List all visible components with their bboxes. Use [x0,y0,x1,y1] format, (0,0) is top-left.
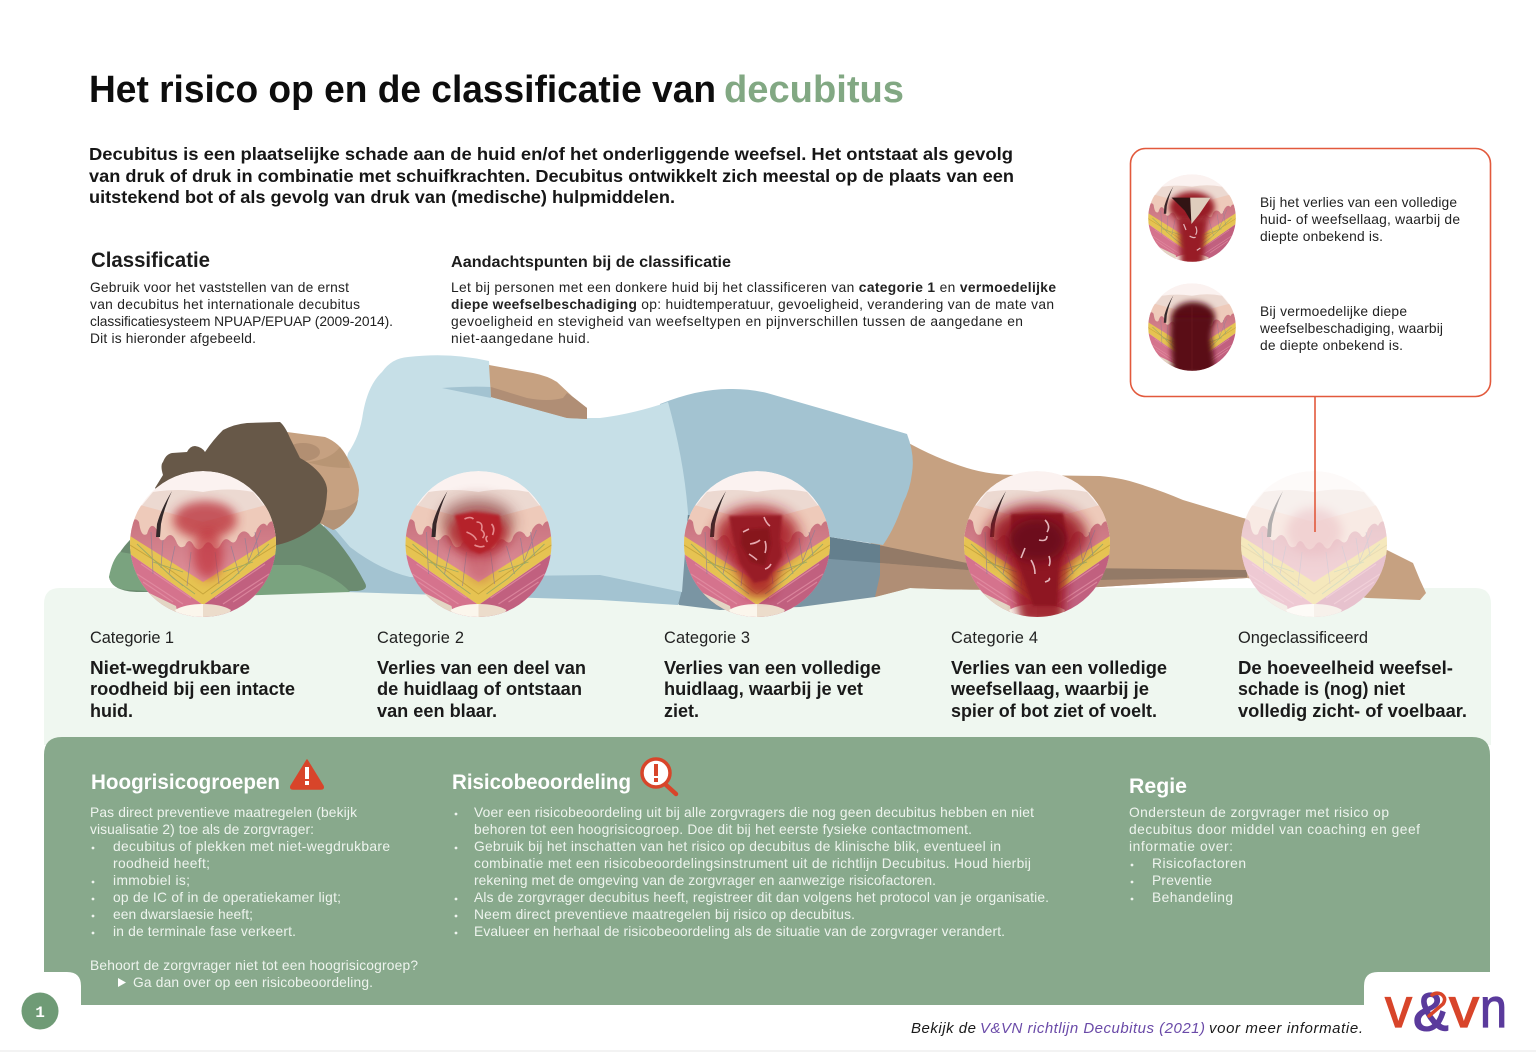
callout text 1: huid- of weefsellaag, waarbij de [1260,212,1460,227]
illustration: lying patient [109,355,1426,610]
categorie 1 text: Niet-wegdrukbare [90,658,250,678]
categorie 1 text: roodheid bij een intacte [90,679,295,699]
text block: Hoogrisicogroepen: Ga dan over op een risicobeoordeling. [133,975,373,990]
text block: Classificatie: Gebruik voor het vaststellen van de ernst [90,280,349,295]
text block: Risicobeoordeling: Als de zorgvrager decubitus heeft, registreer dit dan volgens het protocol van je organisatie. [474,890,1049,905]
neck fold [307,447,350,468]
text block: Hoogrisicogroepen: een dwarslaesie heeft; [113,907,253,922]
logo: V&VN: n [1480,976,1507,1039]
legs [870,441,1426,600]
title: Het risico op en de classificatie van [89,69,716,111]
lower leg [875,563,1247,597]
text block: Hoogrisicogroepen: decubitus of plekken met niet-wegdrukbare [113,839,390,854]
ongeclassificeerd text [1238,629,1467,721]
categorie 3 text: ziet. [664,701,699,721]
text block: Hoogrisicogroepen: visualisatie 2) toe als de zorgvrager: [90,822,314,837]
text block: Aandachtspunten: diepe weefselbeschadiging op: huidtemperatuur, gevoeligheid, verandering van de mate van [451,297,1054,312]
intro text: Decubitus is een plaatselijke schade aan de huid en/of het onderliggende weefsel. Het ontstaat als gevolg [89,144,1013,164]
callout text 2 [1259,304,1443,353]
categorie 4 text: spier of bot ziet of voelt. [951,701,1157,721]
text block: Hoogrisicogroepen: Behoort de zorgvrager niet tot een hoogrisicogroep? [90,958,418,973]
arm shadow [442,387,491,398]
icon: warning triangle [291,760,323,789]
text block: Classificatie: Classificatie [91,249,210,272]
ongeclassificeerd text: Ongeclassificeerd [1238,629,1368,647]
skin illustration: necrotic wound [1148,174,1236,266]
skin illustration: categorie 3 [684,471,830,624]
icon: magnifier [642,759,676,794]
text block: Regie: informatie over: [1129,839,1233,854]
skin illustration: ongeclassificeerd [1241,471,1387,624]
heading: Risicobeoordeling: Risicobeoordeling [452,771,631,794]
heading: Regie: Regie [1129,775,1187,798]
text block: Regie: decubitus door middel van coaching en geef [1129,822,1420,837]
title: decubitus [724,69,904,111]
text block: Hoogrisicogroepen: in de terminale fase verkeert. [113,924,296,939]
skin illustration: deep tissue injury [1148,283,1236,375]
categorie 3 text [664,629,881,721]
footer note: V&VN richtlijn Decubitus (2021) [980,1020,1205,1037]
skin illustration: categorie 4 [964,471,1110,624]
arm [489,365,587,419]
panel: categories background [44,588,1491,745]
footer note: Bekijk de [911,1020,976,1037]
text block: Classificatie: Dit is hieronder afgebeeld. [90,331,256,346]
text block: Risicobeoordeling: Voer een risicobeoordeling uit bij alle zorgvragers die nog geen decubitus hebben en niet [474,805,1034,820]
skin illustration: categorie 1 [130,471,276,624]
categorie 1 text: Categorie 1 [90,629,174,647]
categorie 4 text [950,629,1167,721]
trousers lower [670,510,880,610]
text block: Risicobeoordeling: rekening met de omgeving van de zorgvrager en aanwezige risicofactoren. [474,873,936,888]
text block: Risicobeoordeling: Neem direct preventieve maatregelen bij risico op decubitus. [474,907,855,922]
footer note [911,1020,1363,1037]
text block: Classificatie [90,249,393,346]
callout text 2: Bij vermoedelijke diepe [1260,304,1407,319]
text block: Regie [1129,805,1420,905]
callout connector line [1314,396,1316,532]
intro text: uitstekend bot of als gevolg van druk van (medische) hulpmiddelen. [89,187,675,207]
heading: Hoogrisicogroepen: Hoogrisicogroepen [91,771,280,794]
text block: Risicobeoordeling: Evalueer en herhaal de risicobeoordeling als de situatie van de zorgvrager verandert. [474,924,1005,939]
text block: Hoogrisicogroepen [90,805,418,990]
arm lower [491,387,587,419]
text block: Risicobeoordeling: Gebruik bij het inschatten van het risico op decubitus de klinische blik, eventueel in [474,839,1001,854]
categorie 3 text: Categorie 3 [664,629,750,647]
categorie 2 text [377,629,586,721]
text block: Aandachtspunten [451,254,1056,346]
ongeclassificeerd text: schade is (nog) niet [1238,679,1405,699]
page number badge [22,992,58,1030]
logo: V&VN [1385,976,1507,1043]
intro text: van druk of druk in combinatie met schuifkrachten. Decubitus ontwikkelt zich meestal op de plaats van een [89,166,1014,186]
text block: Regie: Ondersteun de zorgvrager met risico op [1129,805,1389,820]
callout text 1 [1260,195,1460,244]
hair [155,422,327,545]
ongeclassificeerd text: volledig zicht- of voelbaar. [1238,701,1467,721]
categorie 2 text: van een blaar. [377,701,497,721]
callout text 2: de diepte onbekend is. [1260,338,1403,353]
text block: Risicobeoordeling [455,805,1049,939]
shirt [333,355,688,592]
categorie 1 text: huid. [90,701,133,721]
text block: Aandachtspunten: Let bij personen met een donkere huid bij het classificeren van categorie 1 en vermoedelijke [451,280,1056,295]
head shadow [320,500,358,530]
text block: Risicobeoordeling: behoren tot een hoogrisicogroep. Doe dit bij het eerste fysieke contactmoment. [474,822,972,837]
footer note: voor meer informatie. [1209,1020,1363,1037]
ear [286,443,320,461]
ongeclassificeerd text: De hoeveelheid weefsel- [1238,658,1453,678]
text block: Regie: Preventie [1152,873,1212,888]
callout box [1130,148,1490,396]
callout text 1: diepte onbekend is. [1260,229,1383,244]
text block: Aandachtspunten: gevoeligheid en stevigheid van weefseltypen en pijnverschillen tussen de aangedane en [451,314,1023,329]
categorie 4 text: weefsellaag, waarbij je [950,679,1149,699]
categorie 2 text: Categorie 2 [377,629,464,647]
categorie 1 text [90,629,295,721]
trousers [660,389,913,545]
text block: Regie: Risicofactoren [1152,856,1246,871]
text block: Regie: Behandeling [1152,890,1233,905]
page number badge: 1 [35,1004,45,1022]
pillow [109,523,366,596]
callout text 2: weefselbeschadiging, waarbij [1259,321,1443,336]
categorie 2 text: Verlies van een deel van [377,658,586,678]
categorie 2 text: de huidlaag of ontstaan [377,679,582,699]
text block: Hoogrisicogroepen: op de IC of in de operatiekamer ligt; [113,890,341,905]
logo: V&VN: v [1385,976,1412,1039]
panel: risk section [44,737,1490,1005]
intro text [89,144,1014,207]
text block: Classificatie: classificatiesysteem NPUAP/EPUAP (2009-2014). [90,314,393,329]
text block: Classificatie: van decubitus het internationale decubitus [90,297,360,312]
logo: V&VN: v [1449,976,1479,1039]
text block: Risicobeoordeling: combinatie met een risicobeoordelingsinstrument uit de richtlijn Decubitus. Houd hierbij [474,856,1031,871]
trousers band [680,513,880,563]
categorie 4 text: Verlies van een volledige [951,658,1167,678]
head [287,432,359,530]
text block: Hoogrisicogroepen: immobiel is; [113,873,190,888]
skin illustration: categorie 2 [406,471,552,624]
text block: Hoogrisicogroepen: Pas direct preventieve maatregelen (bekijk [90,805,357,820]
logo: V&VN: & [1412,980,1450,1043]
text block: Aandachtspunten: Aandachtspunten bij de classificatie [451,254,731,271]
shirt underside [322,520,682,605]
text block: Aandachtspunten: niet-aangedane huid. [451,331,590,346]
categorie 3 text: huidlaag, waarbij je vet [664,679,863,699]
categorie 3 text: Verlies van een volledige [664,658,881,678]
leg shadow [878,545,1247,580]
callout text 1: Bij het verlies van een volledige [1260,195,1457,210]
text block: Hoogrisicogroepen: roodheid heeft; [113,856,210,871]
categorie 4 text: Categorie 4 [951,629,1038,647]
